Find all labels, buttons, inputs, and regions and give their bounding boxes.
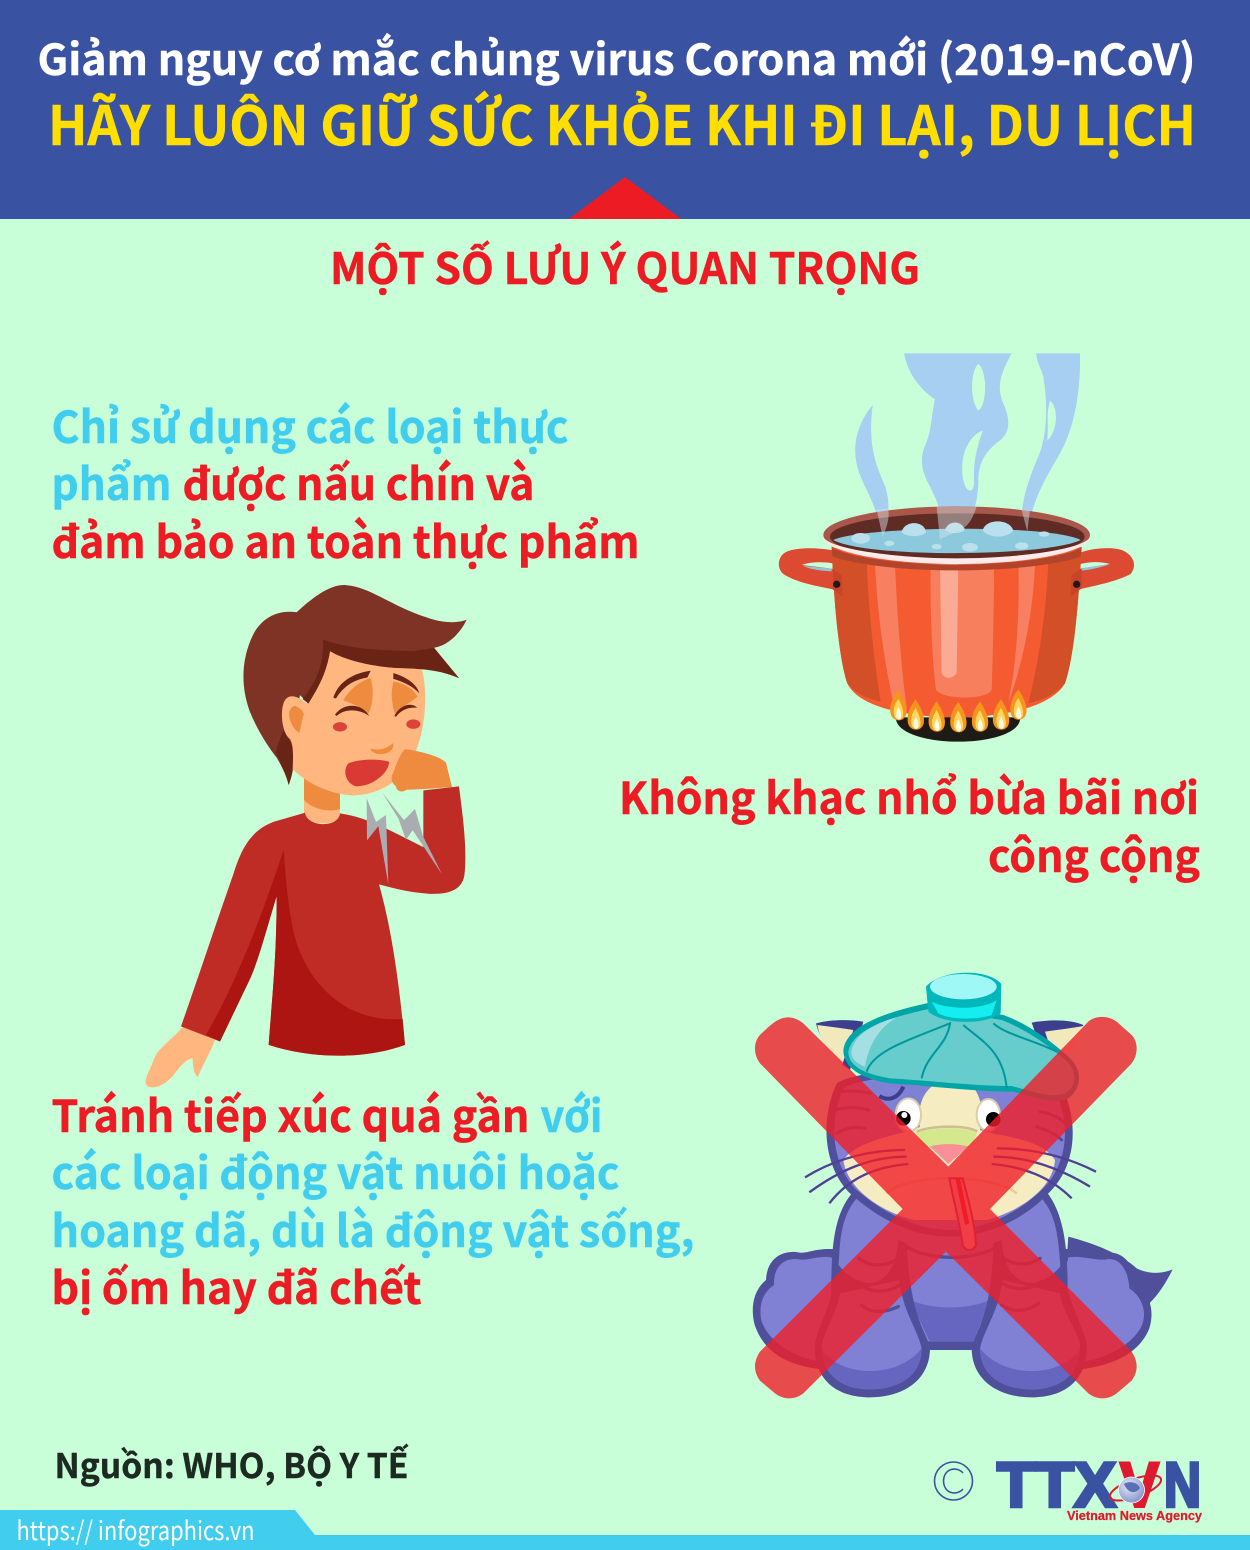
flames [890,689,1027,732]
text block: avoid animals [52,1081,694,1317]
logo: TTXVN [934,1450,1202,1523]
logo wordmark: TTX [997,1450,1116,1520]
section heading: MỘT SỐ LƯU Ý QUAN TRỌNG [330,235,920,297]
logo tagline: Vietnam News Agency [1067,1509,1202,1523]
ice bag cap [926,973,1001,1022]
text block: cooked food: được nấu chín và [182,449,534,513]
cat head stripes [835,1091,1065,1140]
ear [289,706,304,733]
title line 1: Giảm nguy cơ mắc chủng virus Corona mới (2019-nCoV) [38,27,1196,88]
text block: cooked food: Chỉ sử dụng các loại thực [52,392,568,456]
rim and water [823,506,1090,564]
rivets [833,570,843,597]
mouth [345,760,389,786]
source note: Nguồn: WHO, BỘ Y TẾ [54,1439,409,1488]
hair back [243,612,330,785]
text block: cooked food: đảm bảo an toàn thực phẩm [52,507,640,571]
text block: no spitting [619,763,1200,885]
face [282,649,425,795]
eye shadows [343,678,373,714]
fist [392,749,452,791]
cat haunches [753,1249,850,1369]
cough lightning [367,792,442,884]
hair top [277,585,467,704]
text block: avoid animals: Tránh tiếp xúc quá gần [52,1081,530,1145]
text block: avoid animals: bị ốm hay đã chết [52,1253,422,1317]
cross mark [755,1017,1137,1398]
neck [304,773,340,824]
copyright mark [934,1462,972,1500]
text block: cooked food: phẩm [52,449,172,513]
text block: no spitting: công cộng [988,821,1200,885]
title line 2: HÃY LUÔN GIỮ SỨC KHỎE KHI ĐI LẠI, DU LỊCH [48,82,1196,161]
ice bag [843,1003,1079,1101]
illustration: sick cat with crossed mark [753,973,1173,1398]
cat eyes [896,1098,921,1132]
header band [0,0,1250,219]
cat ears [816,1020,863,1070]
bubbles [851,521,1049,552]
text block: avoid animals: với [540,1081,602,1145]
pot body [832,547,1082,718]
text block: cooked food [52,392,640,571]
illustration: boiling pot [779,353,1134,742]
logo globe [1107,1470,1164,1506]
steam over rim [877,507,1030,539]
thermometer [949,1178,976,1250]
rim shade [832,548,1082,570]
text block: avoid animals: hoang dã, dù là động vật sống, [52,1196,694,1260]
logo: TTXVN: N [1164,1450,1201,1520]
right handle [1072,548,1134,591]
steam [855,353,1080,537]
footer url: https:// infographics.vn [16,1511,254,1548]
cat muzzle [843,1083,1055,1220]
cat torso [831,1190,1068,1350]
left handle [779,548,840,590]
cat nose [930,1144,968,1164]
illustration: coughing boy [146,585,467,1087]
footer bar [0,1510,1250,1550]
logo: TTXVN: V [1120,1450,1159,1520]
text block: avoid animals: các loại động vật nuôi hoặc [52,1138,620,1202]
sweater [181,786,465,1056]
cat legs [815,1240,930,1397]
cat tail [1067,1237,1173,1307]
cat leg stripes [858,1247,1042,1311]
nose [371,743,393,754]
cat whiskers [805,1148,1096,1203]
cheeks [333,722,347,732]
burner [896,717,1020,742]
hand [146,1026,215,1087]
brows and closed eyes [333,671,419,717]
text block: no spitting: Không khạc nhổ bừa bãi nơi [619,763,1199,827]
cat head [826,1068,1073,1237]
